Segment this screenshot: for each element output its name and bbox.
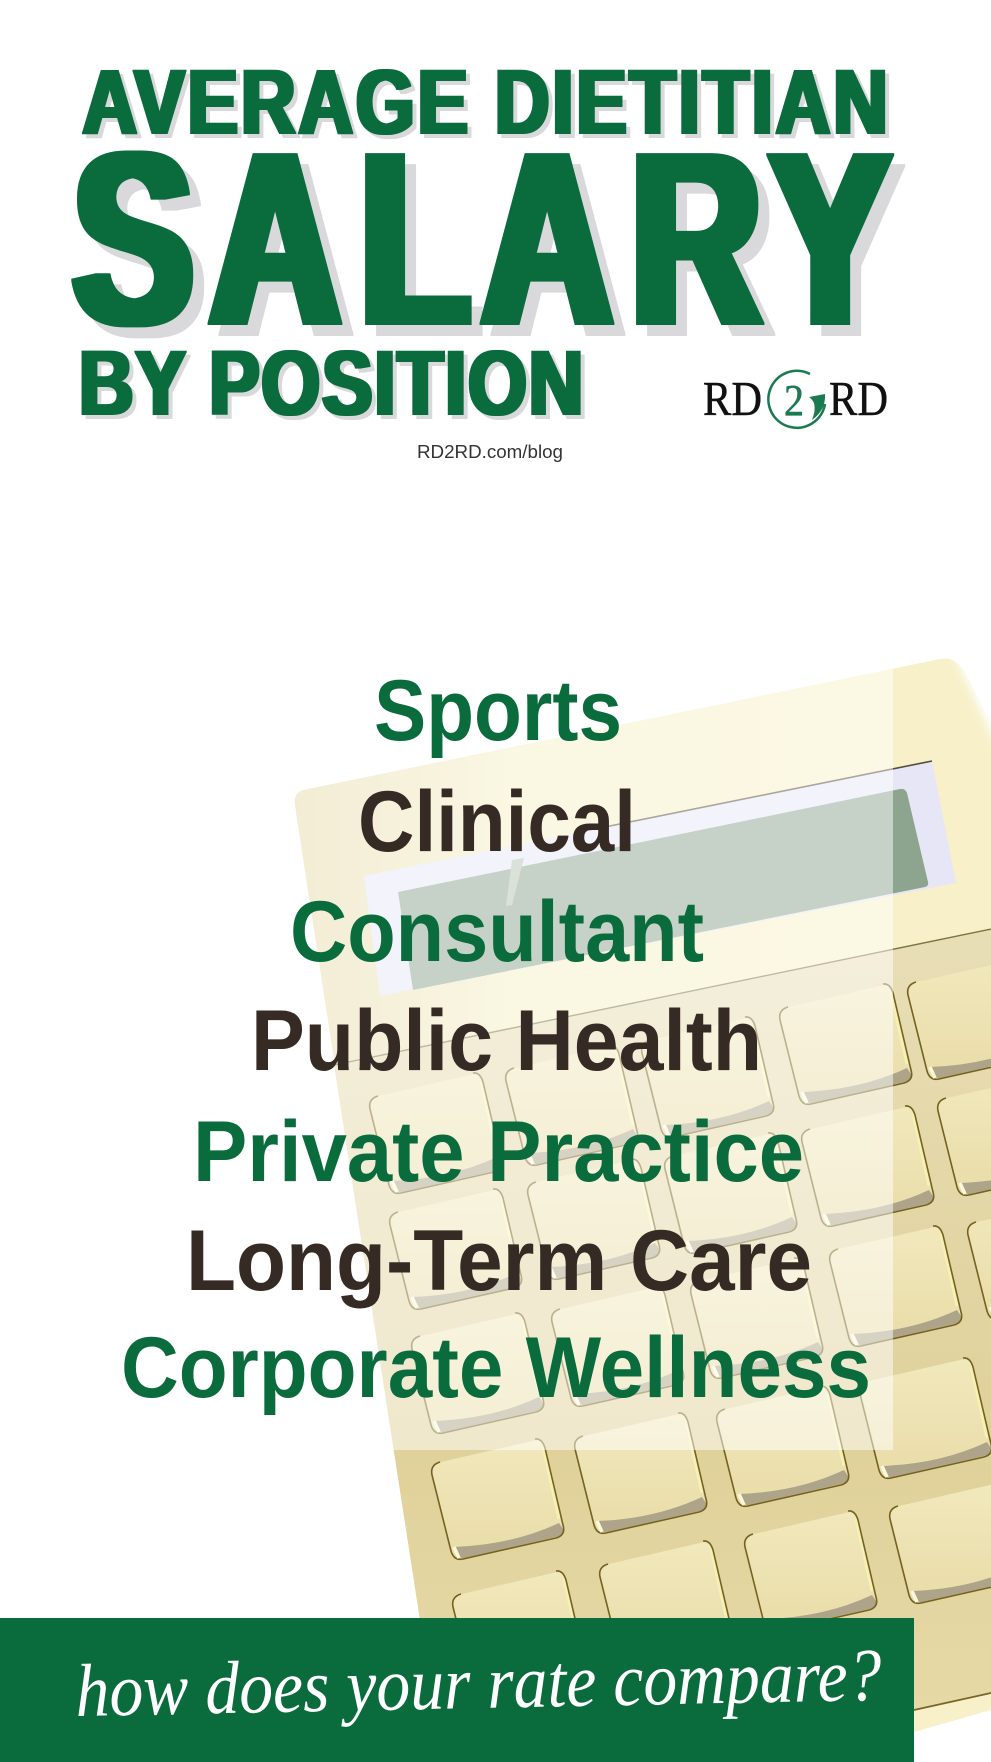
LCD screen bbox=[398, 789, 928, 990]
position: sports: Sports bbox=[374, 663, 622, 759]
translucent white panel bbox=[0, 640, 893, 1450]
position: consultant: Consultant bbox=[290, 884, 704, 980]
keypad edge line bbox=[334, 929, 991, 1065]
logo circle bbox=[768, 371, 825, 428]
position: corporate wellness: Corporate Wellness bbox=[121, 1320, 871, 1416]
display bezel top line bbox=[600, 761, 932, 828]
title line: average dietitian: AVERAGE DIETITIAN bbox=[82, 50, 888, 153]
logo numeral: 2 bbox=[784, 376, 804, 425]
title bbox=[73, 50, 901, 438]
title line: by position: BY POSITION bbox=[83, 335, 587, 438]
calculator photo bbox=[295, 652, 991, 1762]
RD2RD logo bbox=[703, 371, 888, 428]
title line: average dietitian: AVERAGE DIETITIAN bbox=[86, 54, 892, 157]
position list bbox=[121, 663, 871, 1416]
logo leaf icon bbox=[809, 394, 825, 420]
footer banner bbox=[0, 1618, 914, 1762]
title line: by position: BY POSITION bbox=[79, 331, 583, 434]
blog url: RD2RD.com/blog bbox=[417, 442, 563, 462]
position: public health: Public Health bbox=[251, 993, 762, 1089]
position: long-term care: Long-Term Care bbox=[186, 1213, 812, 1309]
footer background bbox=[0, 1618, 914, 1762]
lower edge of keypad bbox=[914, 1693, 991, 1710]
footer tagline: how does your rate compare? bbox=[75, 1632, 882, 1733]
logo right letters: RD bbox=[829, 371, 888, 426]
keypad plate bbox=[334, 929, 991, 1762]
display bezel bbox=[364, 761, 956, 996]
faded top right corner bbox=[962, 652, 991, 745]
logo left letters: RD bbox=[703, 371, 762, 426]
LCD glare bbox=[506, 858, 524, 906]
title line: salary: SALARY bbox=[73, 100, 890, 377]
calculator body bbox=[295, 659, 991, 1762]
keypad keys bbox=[370, 959, 991, 1691]
position: clinical: Clinical bbox=[358, 774, 636, 870]
position: private practice: Private Practice bbox=[193, 1104, 804, 1200]
title line: salary: SALARY bbox=[84, 111, 901, 388]
